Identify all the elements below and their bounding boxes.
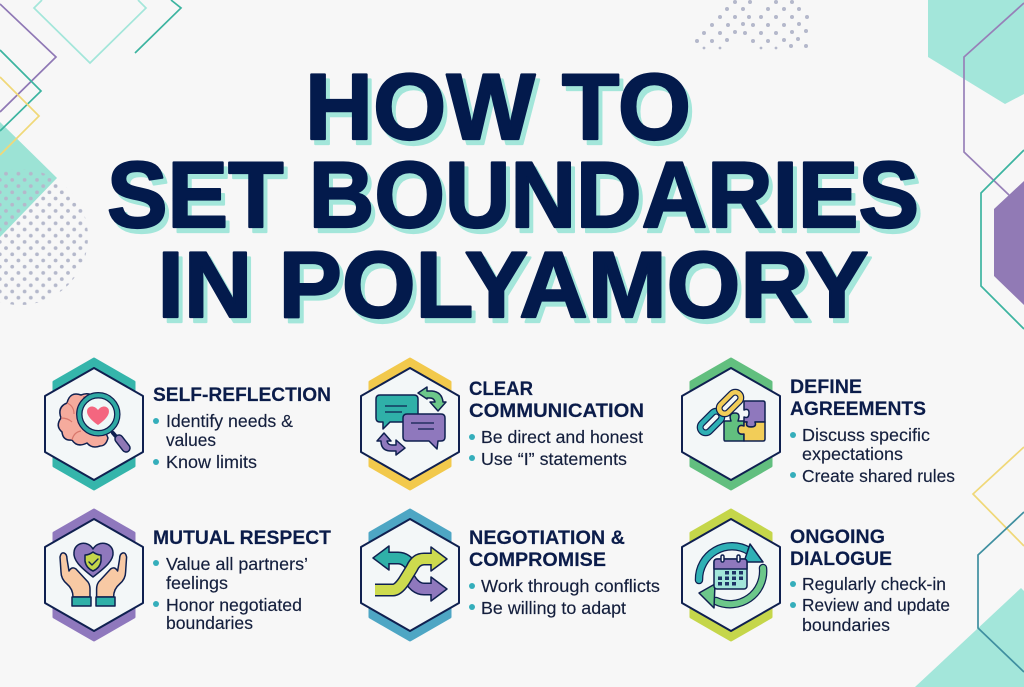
text block: self-reflection bullets: values — [166, 430, 216, 450]
text block: negotiation bullets: Work through conflicts — [481, 576, 660, 596]
panel: self-reflection — [45, 359, 331, 489]
heading: define agreements: DEFINE — [790, 376, 862, 398]
text block: mutual respect bullets: Value all partners’ — [166, 554, 308, 574]
heading: self-reflection: SELF-REFLECTION — [153, 384, 331, 406]
text block: self-reflection bullets: Identify needs & — [166, 411, 293, 431]
text block: clear communication bullets — [469, 427, 643, 469]
text block: ongoing dialogue bullets: Regularly check-in — [802, 574, 946, 594]
text block: mutual respect bullets — [153, 554, 308, 633]
icon: hands holding heart and shield — [45, 510, 143, 640]
heading: negotiation and compromise — [469, 527, 625, 571]
title: IN POLYAMORY — [158, 232, 868, 337]
text block: self-reflection bullets: Know limits — [166, 452, 257, 472]
title: SET BOUNDARIES — [107, 142, 919, 247]
panel: negotiation and compromise — [361, 510, 660, 640]
heading: negotiation and compromise: COMPROMISE — [469, 549, 606, 571]
icon: crossing arrows — [361, 510, 459, 640]
panel: ongoing dialogue — [682, 510, 950, 640]
text block: clear communication bullets: Use “I” statements — [481, 449, 627, 469]
panel: clear communication — [361, 359, 644, 489]
text block: define agreements bullets: Discuss specific — [802, 425, 930, 445]
heading: define agreements — [790, 376, 926, 420]
text block: clear communication bullets: Be direct and honest — [481, 427, 643, 447]
text block: mutual respect bullets: feelings — [166, 573, 228, 593]
title: HOW TO — [305, 54, 691, 159]
text block: ongoing dialogue bullets: boundaries — [802, 615, 890, 635]
text block: mutual respect bullets: Honor negotiated — [166, 595, 302, 615]
heading: define agreements: AGREEMENTS — [790, 398, 926, 420]
text block: define agreements bullets: Create shared rules — [802, 466, 955, 486]
title — [107, 54, 923, 342]
text block: self-reflection bullets — [153, 411, 293, 472]
decoration: top dot cluster — [695, 0, 809, 49]
panel: define agreements — [682, 359, 955, 489]
heading: ongoing dialogue — [790, 526, 892, 570]
text block: define agreements bullets — [790, 425, 955, 486]
icon: brain and magnifier with heart — [45, 359, 143, 489]
icon: calendar with circular arrows — [682, 510, 780, 640]
text block: ongoing dialogue bullets — [790, 574, 950, 635]
heading: clear communication — [469, 378, 644, 422]
title: IN POLYAMORY — [162, 237, 872, 342]
text block: negotiation bullets: Be willing to adapt — [481, 598, 626, 618]
heading: clear communication: COMMUNICATION — [469, 400, 644, 422]
text block: ongoing dialogue bullets: Review and update — [802, 595, 950, 615]
title: SET BOUNDARIES — [111, 147, 923, 252]
heading: ongoing dialogue: DIALOGUE — [790, 548, 892, 570]
title: HOW TO — [309, 59, 695, 164]
heading: ongoing dialogue: ONGOING — [790, 526, 885, 548]
text block: define agreements bullets: expectations — [802, 444, 903, 464]
decoration: top-right hexagons — [928, 0, 1024, 329]
icon: speech bubbles and arrows — [361, 359, 459, 489]
heading: clear communication: CLEAR — [469, 378, 533, 400]
decoration: top-left geometric shapes — [0, 0, 181, 305]
panel: mutual respect — [45, 510, 331, 640]
text block: negotiation bullets — [469, 576, 660, 618]
text block: mutual respect bullets: boundaries — [166, 613, 253, 633]
heading: negotiation and compromise: NEGOTIATION & — [469, 527, 625, 549]
icon: chain links and puzzle — [682, 359, 780, 489]
decoration: bottom-right shapes — [915, 447, 1024, 687]
heading: mutual respect: MUTUAL RESPECT — [153, 527, 331, 549]
